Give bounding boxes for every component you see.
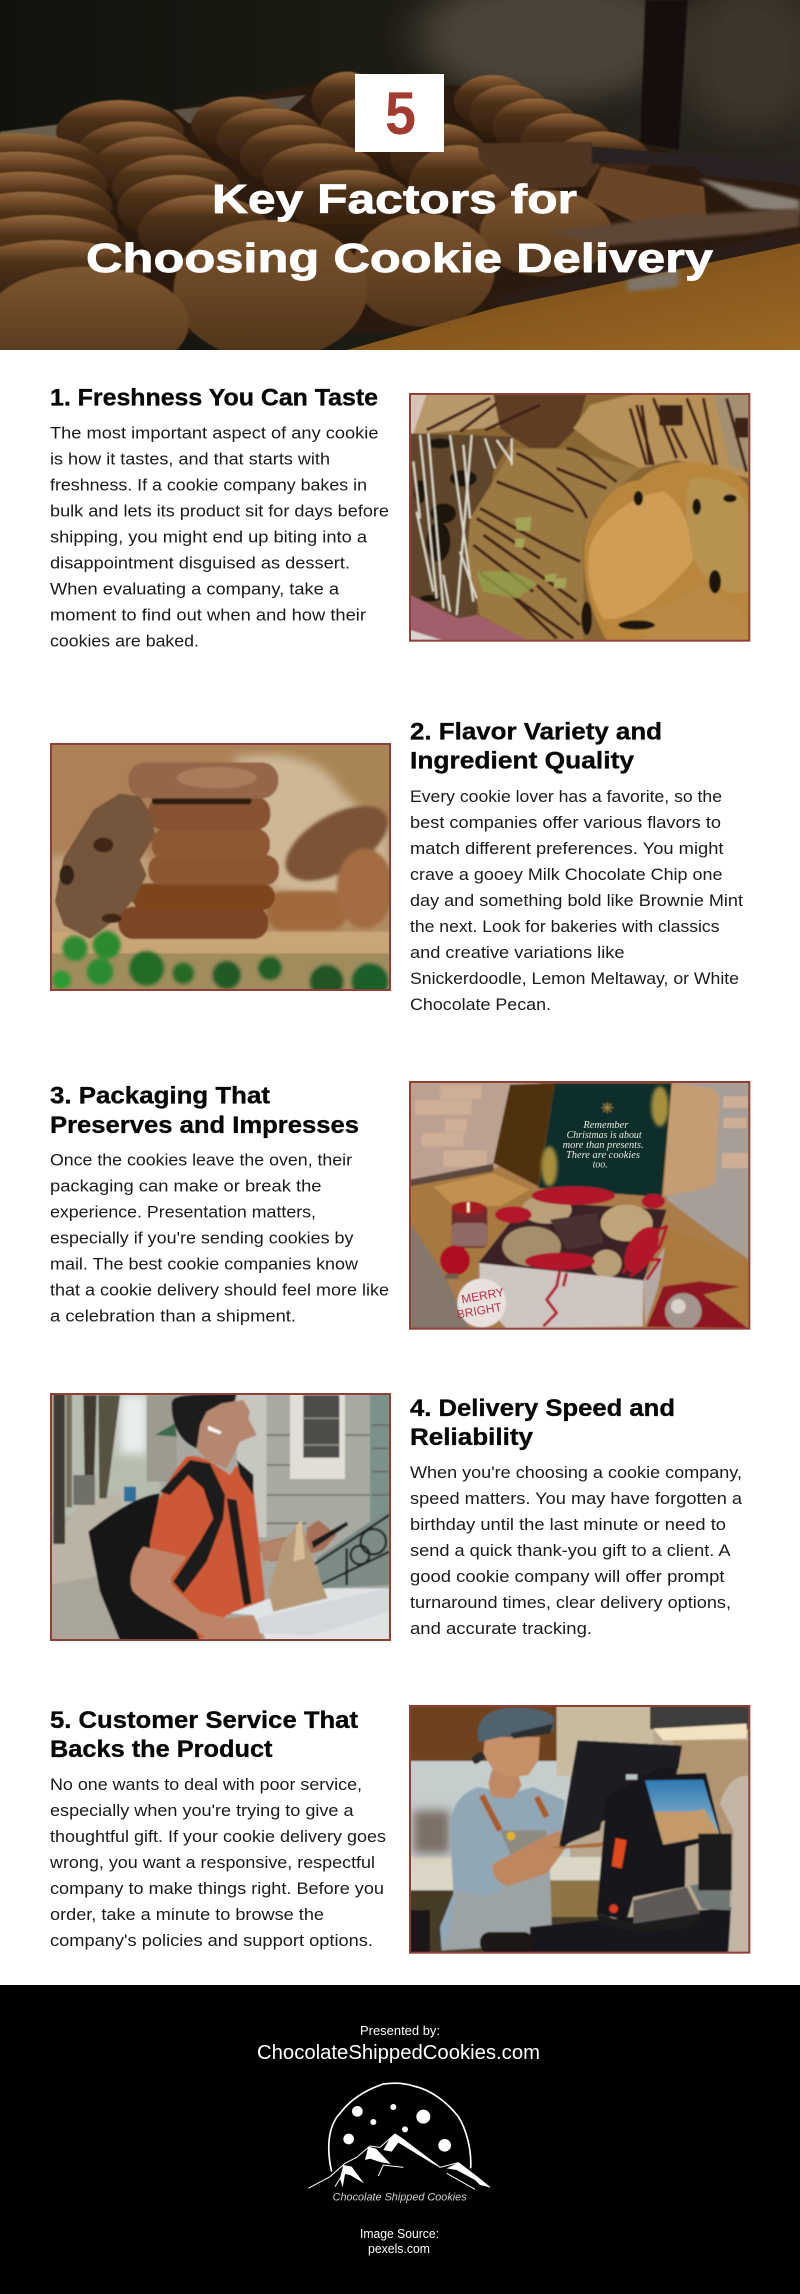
body text 1: When evaluating a company, take a — [50, 580, 340, 598]
body text 1: bulk and lets its product sit for days before — [50, 502, 389, 520]
hero banner — [0, 0, 800, 380]
heading 5: Backs the Product — [50, 1736, 272, 1763]
heading 3: 3. Packaging That — [50, 1082, 270, 1110]
body text 5: especially when you're trying to give a — [50, 1802, 354, 1820]
photo 3: gift box of cookies: MERRY — [460, 1285, 505, 1306]
body text 3: Once the cookies leave the oven, their — [50, 1152, 353, 1170]
heading 5: 5. Customer Service That — [50, 1707, 358, 1734]
presented by label: Presented by: — [360, 2023, 440, 2038]
body text 1: disappointment disguised as dessert. — [50, 554, 350, 572]
body text 3: especially if you're sending cookies by — [50, 1230, 354, 1248]
body text 5: wrong, you want a responsive, respectful — [49, 1854, 375, 1872]
body text 1: is how it tastes, and that starts with — [50, 450, 330, 468]
heading 3: Preserves and Impresses — [50, 1112, 359, 1139]
body text 4: good cookie company will offer prompt — [410, 1568, 725, 1586]
body text 5 — [49, 1776, 386, 1950]
photo 3: gift box of cookies: Christmas is about — [567, 1130, 643, 1141]
heading 2: Ingredient Quality — [410, 748, 634, 774]
body text 3: packaging can make or break the — [50, 1178, 322, 1196]
body text 4 — [410, 1464, 743, 1638]
body text 2: Every cookie lover has a favorite, so the — [410, 788, 722, 806]
title: Choosing Cookie Delivery — [86, 235, 713, 281]
heading 2: 2. Flavor Variety and — [410, 718, 662, 746]
photo 3: gift box of cookies: There are cookies — [566, 1150, 640, 1161]
body text 2: the next. Look for bakeries with classics — [410, 918, 720, 936]
body text 1: shipping, you might end up biting into a — [50, 528, 368, 546]
section 3: packaging — [50, 1082, 749, 1330]
body text 1: cookies are baked. — [50, 632, 199, 650]
photo 5: cashier at a POS terminal — [410, 1706, 749, 1954]
number badge — [355, 74, 444, 152]
body text 1: moment to find out when and how their — [50, 606, 367, 624]
body text 4: turnaround times, clear delivery options, — [410, 1594, 731, 1612]
body text 3: mail. The best cookie companies know — [50, 1256, 358, 1274]
body text 2: crave a gooey Milk Chocolate Chip one — [410, 866, 722, 884]
image source credit: Image Source: — [360, 2226, 439, 2241]
photo 3: gift box of cookies: Remember — [582, 1120, 629, 1131]
section 2: flavor variety — [50, 718, 743, 1014]
title: Key Factors for — [212, 176, 577, 222]
heading 4: 4. Delivery Speed and — [410, 1395, 675, 1422]
footer — [0, 1985, 800, 2294]
body text 4: speed matters. You may have forgotten a — [410, 1490, 743, 1508]
body text 5: order, take a minute to browse the — [50, 1906, 324, 1924]
logo: cookie and mountains — [308, 2083, 490, 2204]
body text 4: and accurate tracking. — [410, 1620, 592, 1638]
photo 3: gift box of cookies: more than presents. — [563, 1140, 644, 1151]
photo 3: gift box of cookies: BRIGHT — [456, 1300, 503, 1322]
body text 2: best companies offer various flavors to — [410, 814, 721, 832]
body text 3: a celebration than a shipment. — [50, 1308, 296, 1326]
body text 2: Chocolate Pecan. — [410, 996, 551, 1014]
photo 3: gift box of cookies: too. — [593, 1159, 608, 1170]
heading 4: Reliability — [410, 1424, 533, 1451]
body text 5: thoughtful gift. If your cookie delivery goes — [50, 1828, 386, 1846]
body text 1 — [50, 424, 389, 650]
body text 5: company's policies and support options. — [50, 1932, 373, 1950]
body text 4: send a quick thank-you gift to a client. A — [410, 1542, 730, 1560]
body text 3: that a cookie delivery should feel more like — [50, 1282, 389, 1300]
heading 1: 1. Freshness You Can Taste — [50, 384, 378, 412]
body text 5: No one wants to deal with poor service, — [50, 1776, 362, 1794]
section 5: customer service — [49, 1706, 749, 1954]
body text 5: company to make things right. Before you — [50, 1880, 384, 1898]
hero photo: tray of cookies — [0, 0, 800, 380]
number badge: 5 — [385, 80, 416, 147]
photo 1: assorted drizzled cookies — [410, 394, 749, 641]
body text 3 — [50, 1152, 389, 1326]
body text 3: experience. Presentation matters, — [50, 1204, 316, 1222]
website: ChocolateShippedCookies.com — [257, 2041, 540, 2064]
body text 1: The most important aspect of any cookie — [50, 424, 378, 442]
body text 2: match different preferences. You might — [410, 840, 724, 858]
body text 2: and creative variations like — [410, 944, 624, 962]
image source credit: pexels.com — [368, 2241, 430, 2256]
body text 4: When you're choosing a cookie company, — [410, 1464, 742, 1482]
body text 4: birthday until the last minute or need to — [410, 1516, 726, 1534]
body text 2: Snickerdoodle, Lemon Meltaway, or White — [410, 970, 739, 988]
logo: cookie and mountains: Chocolate Shipped Cookies — [333, 2192, 467, 2204]
photo 2: stack of cookies — [50, 744, 400, 1000]
photo 3: gift box of cookies — [410, 1082, 749, 1330]
photo 4: courier with backpack — [50, 1394, 390, 1641]
section 4: delivery speed — [50, 1394, 743, 1641]
section 1: freshness — [50, 384, 749, 650]
body text 1: freshness. If a cookie company bakes in — [50, 476, 367, 494]
body text 2 — [410, 788, 743, 1014]
body text 2: day and something bold like Brownie Mint — [410, 892, 743, 910]
